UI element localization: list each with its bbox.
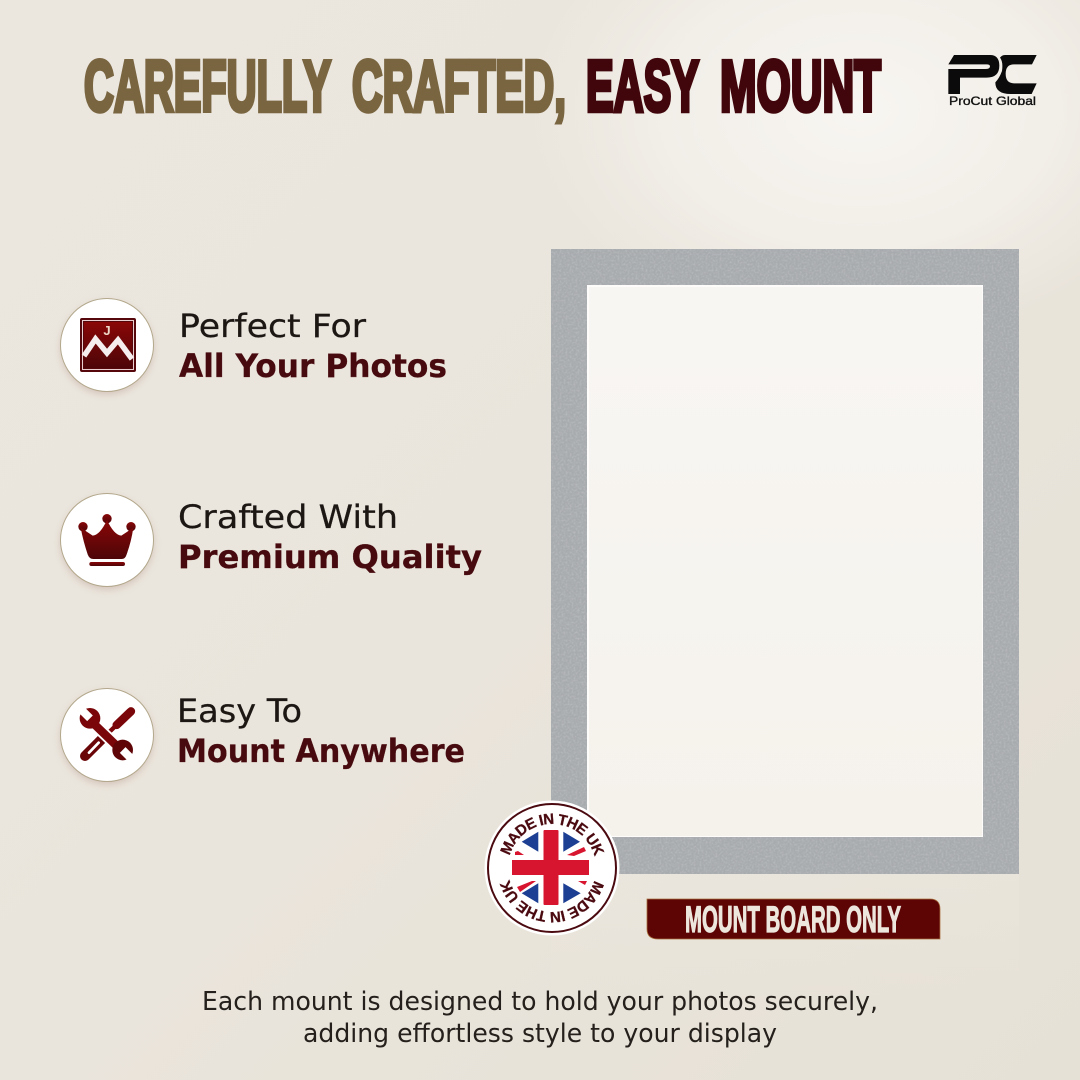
title bbox=[84, 47, 881, 127]
label: Crafted With bbox=[178, 498, 398, 536]
label bbox=[178, 498, 482, 576]
label: mount board only bbox=[647, 899, 940, 940]
title: CAREFULLY bbox=[84, 47, 331, 127]
logo: ProCut Global: ProCut Global bbox=[949, 94, 1036, 108]
caption bbox=[202, 987, 878, 1049]
feature 1: perfect for all your photos bbox=[60, 298, 447, 394]
badge: made in the uk bbox=[484, 800, 620, 936]
feature 3: easy to mount anywhere bbox=[60, 688, 465, 784]
caption: adding effortless style to your display bbox=[303, 1019, 777, 1049]
icon: wrench and screwdriver bbox=[60, 688, 154, 784]
title: CRAFTED, bbox=[352, 47, 566, 127]
icon: photo: J bbox=[103, 323, 111, 338]
title: EASY bbox=[586, 47, 699, 127]
label: All Your Photos bbox=[179, 347, 447, 385]
caption: Each mount is designed to hold your photos securely, bbox=[202, 987, 878, 1017]
label: Mount Anywhere bbox=[177, 732, 465, 770]
label bbox=[177, 692, 465, 770]
flag bbox=[512, 830, 589, 905]
icon: photo bbox=[60, 298, 154, 394]
label: mount board only: MOUNT BOARD ONLY bbox=[685, 899, 901, 940]
curved text bbox=[500, 813, 604, 923]
mount board frame bbox=[551, 249, 1019, 874]
label: Easy To bbox=[177, 692, 302, 730]
icon: crown bbox=[60, 494, 154, 589]
logo: ProCut Global bbox=[948, 55, 1037, 108]
curved text: MADE IN THE UK bbox=[500, 879, 604, 923]
curved text: MADE IN THE UK bbox=[500, 813, 604, 857]
label bbox=[179, 307, 447, 385]
feature 2: crafted with premium quality bbox=[60, 494, 482, 589]
title: MOUNT bbox=[720, 47, 881, 127]
label: Premium Quality bbox=[178, 538, 482, 576]
label: Perfect For bbox=[179, 307, 367, 345]
